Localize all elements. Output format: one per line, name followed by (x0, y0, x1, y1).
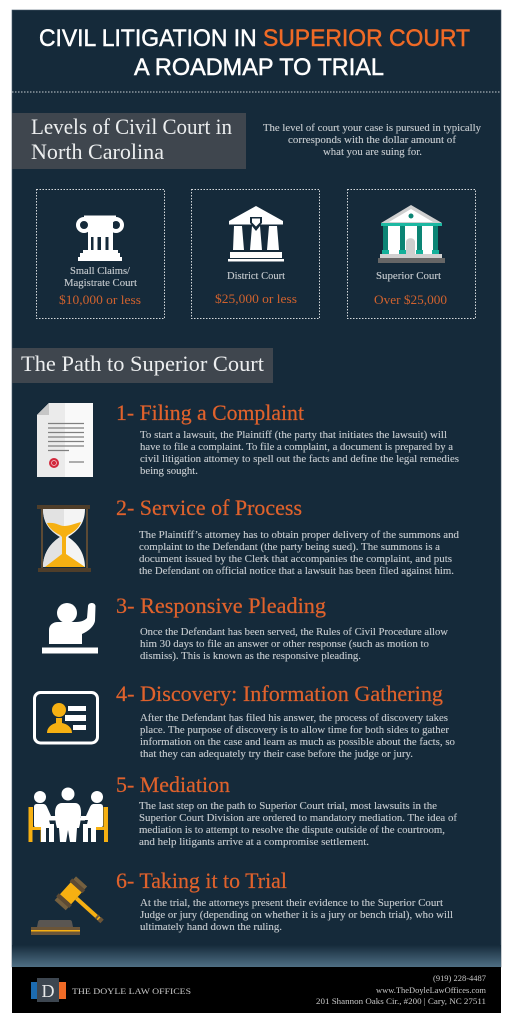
heading: levels of civil court (12, 113, 246, 169)
panel: superior court: Over $25,000 (374, 292, 447, 307)
footer (12, 967, 501, 1013)
step 5: mediation is to attempt to resolve the dispute outside of the courtroom, (139, 825, 445, 836)
step 2: complaint to the Defendant (the party being sued). The summons is a (139, 542, 440, 553)
intro text: corresponds with the dollar amount of (288, 135, 456, 146)
heading: the path to superior court (12, 348, 273, 383)
step 6: ultimately hand down the ruling. (140, 922, 282, 933)
icon: column (78, 216, 122, 261)
step 1: being sought. (140, 466, 198, 477)
step 6: Judge or jury (depending on whether it is a jury or bench trial), who will (140, 910, 453, 921)
panel: small claims: Small Claims/ (70, 266, 130, 277)
step 1: civil litigation attorney to spell out the facts and define the legal remedies (140, 454, 459, 465)
step 5: Superior Court Division are ordered to mandatory mediation. The idea of (139, 813, 457, 824)
step 2: the Defendant on official notice that a lawsuit has been filed against him. (139, 566, 454, 577)
step 5: and help litigants arrive at a compromise settlement. (139, 837, 369, 848)
step 4: After the Defendant has filed his answer, the process of discovery takes (140, 713, 448, 724)
step 4: place. The purpose of discovery is to allow time for both sides to gather (140, 725, 449, 736)
panel: district court (192, 190, 320, 318)
panel: small claims (36, 190, 164, 318)
icon: superior courthouse (378, 205, 445, 263)
step 3: Once the Defendant has been served, the Rules of Civil Procedure allow (140, 627, 448, 638)
step 2 (116, 495, 460, 577)
contact details: www.TheDoyleLawOffices.com (376, 985, 486, 995)
step 4: 4- Discovery: Information Gathering (116, 681, 443, 706)
step 3: him 30 days to file an answer or other response (such as motion to (140, 639, 429, 650)
intro text (263, 123, 482, 158)
heading: the path to superior court: The Path to Superior Court (21, 351, 264, 376)
title: A ROADMAP TO TRIAL (134, 54, 384, 81)
panel: small claims: Magistrate Court (64, 278, 137, 289)
step 5: The last step on the path to Superior Court trial, most lawsuits in the (139, 801, 437, 812)
step 1: To start a lawsuit, the Plaintiff (the party that initiates the lawsuit) will (140, 430, 447, 441)
icon: gavel (31, 875, 113, 935)
step 3: dismiss). This is known as the responsive pleading. (140, 651, 361, 662)
step 4 (116, 681, 455, 760)
panel: district court: District Court (227, 271, 285, 282)
intro text: what you are suing for. (323, 147, 422, 158)
step 2: document issued by the Clerk that accompanies the complaint, and puts (139, 554, 452, 565)
step 2: 2- Service of Process (116, 495, 302, 520)
step 4: that they can adequately try their case before the judge or jury. (140, 749, 413, 760)
step 5 (116, 772, 457, 848)
contact details: 201 Shannon Oaks Cir., #200 | Cary, NC 27511 (316, 996, 486, 1006)
firm name: THE DOYLE LAW OFFICES (72, 986, 191, 996)
step 1: 1- Filing a Complaint (116, 400, 304, 425)
contact details: (919) 228-4487 (433, 973, 486, 983)
heading: levels of civil court: Levels of Civil Court in (31, 114, 232, 139)
icon: mediation meeting (28, 788, 108, 842)
logo (31, 978, 66, 1002)
step 4: information on the case and learn as much as possible about the facts, so (140, 737, 455, 748)
title (39, 25, 470, 81)
step 3: 3- Responsive Pleading (116, 593, 326, 618)
bottom glow (12, 945, 501, 967)
title: CIVIL LITIGATION IN SUPERIOR COURT (39, 25, 470, 52)
panel: superior court: Superior Court (376, 271, 441, 282)
panel: superior court (348, 190, 476, 318)
icon: courthouse (228, 206, 284, 262)
logo: D (42, 981, 54, 1001)
step 6: 6- Taking it to Trial (116, 868, 287, 893)
panel: district court: $25,000 or less (215, 291, 297, 306)
step 2: The Plaintiff’s attorney has to obtain proper delivery of the summons and (139, 530, 460, 541)
icon: document (37, 403, 93, 477)
intro text: The level of court your case is pursued in typically (263, 123, 482, 134)
icon: person raising hand (42, 603, 98, 654)
step 1: have to file a complaint. To file a complaint, a document is prepared by a (140, 442, 453, 453)
panel: small claims: $10,000 or less (59, 292, 141, 307)
step 6: At the trial, the attorneys present their evidence to the Superior Court (140, 898, 443, 909)
step 6 (116, 868, 453, 933)
step 1 (116, 400, 459, 477)
icon: hourglass (37, 505, 91, 572)
heading: levels of civil court: North Carolina (31, 139, 164, 164)
contact details (316, 973, 486, 1006)
step 5: 5- Mediation (116, 772, 230, 797)
step 3 (116, 593, 448, 662)
icon: id card (34, 692, 98, 743)
